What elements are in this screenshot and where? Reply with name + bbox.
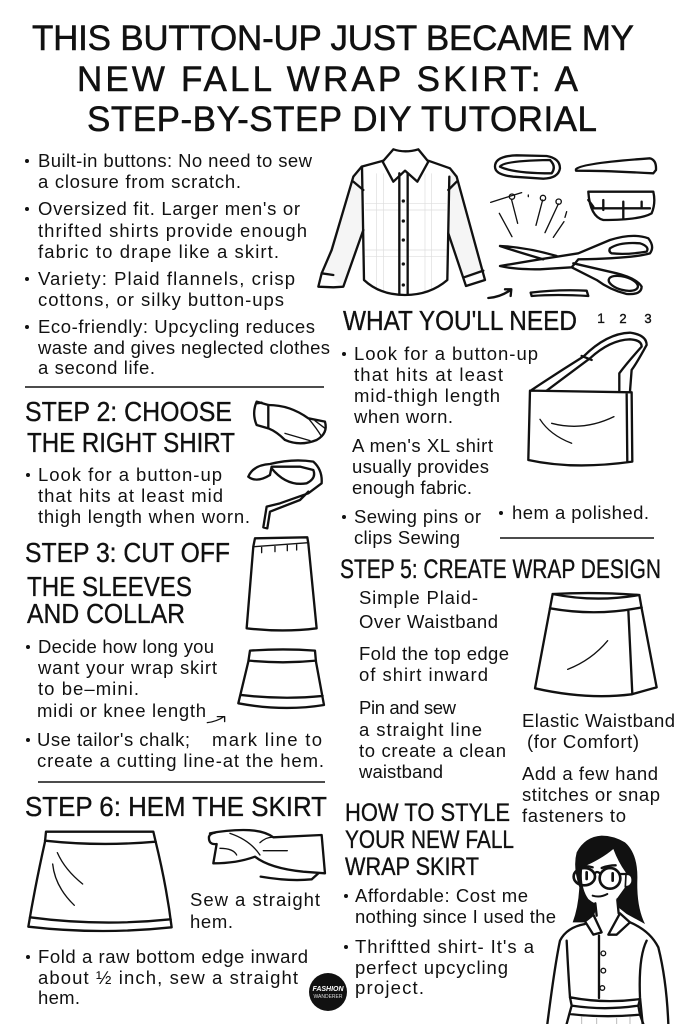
caption: sew a straight hem: hem. xyxy=(190,911,233,932)
panel: step 2 text: that hits at least mid xyxy=(38,485,223,506)
panel: what you'll need text: usually provides xyxy=(352,456,489,477)
panel: what you'll need text: clips Sewing xyxy=(354,527,460,548)
panel: step 3 text: Use tailor's chalk; xyxy=(37,729,190,750)
panel: how to style text: perfect upcycling xyxy=(355,957,508,978)
panel: step 2 text: Look for a button-up xyxy=(38,464,222,485)
panel: step 6 text: Fold a raw bottom edge inward xyxy=(38,946,308,967)
panel: what you'll need text: Look for a button-up xyxy=(354,343,538,364)
panel: why a button-up bullets: a second life. xyxy=(38,357,155,378)
panel: simple waistband text: Over Waistband xyxy=(359,611,498,632)
illustration: long skirt and short skirt xyxy=(207,537,324,723)
heading: what you'll need: 1 xyxy=(597,310,605,326)
panel: step 3 text: create a cutting line-at the hem. xyxy=(37,750,324,771)
panel: step 3 text: mark line to xyxy=(212,729,322,750)
panel: why a button-up bullets: fabric to drape like a skirt. xyxy=(38,241,279,262)
panel: why a button-up bullets: Built-in buttons: No need to sew xyxy=(38,150,313,171)
panel: how to style text: nothing since I used the xyxy=(355,906,556,927)
panel: what you'll need text: enough fabric. xyxy=(352,477,472,498)
panel: why a button-up bullets: Eco-friendly: Upcycling reduces xyxy=(38,316,315,337)
panel: why a button-up bullets: thrifted shirts provide enough xyxy=(38,220,307,241)
heading: step 6: STEP 6: HEM THE SKIRT xyxy=(25,791,327,822)
panel: step 2 text: thigh length when worn. xyxy=(38,506,250,527)
heading: step 3 xyxy=(25,537,230,629)
panel: simple waistband text: Simple Plaid- xyxy=(359,587,478,608)
illustration: plaid button-up shirt xyxy=(318,149,485,295)
heading: how to style xyxy=(345,799,514,881)
panel: how to style text xyxy=(344,885,556,998)
panel: why a button-up bullets: a closure from scratch. xyxy=(38,171,241,192)
caption: sew a straight hem xyxy=(190,889,320,932)
heading: how to style: YOUR NEW FALL xyxy=(345,826,514,854)
panel: what you'll need text: when worn. xyxy=(353,406,453,427)
panel: elastic waistband text: Add a few hand xyxy=(522,763,658,784)
illustration: wrap skirt xyxy=(535,593,657,696)
title xyxy=(32,19,634,139)
logo: fashion wanderer: WANDERER xyxy=(314,994,343,1000)
illustration: cut sleeves xyxy=(248,402,326,528)
panel: what you'll need text xyxy=(342,343,649,548)
panel: elastic waistband text: (for Comfort) xyxy=(527,731,639,752)
panel: step 3 text: to be–mini. xyxy=(38,678,139,699)
panel: step 6 text: hem. xyxy=(38,987,80,1008)
panel: why a button-up bullets: waste and gives neglected clothes xyxy=(37,337,330,358)
heading: step 3: STEP 3: CUT OFF xyxy=(25,537,230,568)
panel: how to style text: Thriftted shirt- It's a xyxy=(355,936,535,957)
panel: simple waistband text: Fold the top edge xyxy=(359,643,509,664)
heading: step 3: AND COLLAR xyxy=(27,598,185,629)
illustration: woman with glasses xyxy=(547,836,668,1024)
panel: simple waistband text: to create a clean xyxy=(359,740,506,761)
panel: step 3 text xyxy=(26,636,324,771)
panel: simple waistband text xyxy=(358,587,509,782)
panel: why a button-up bullets: cottons, or silky button-ups xyxy=(38,289,284,310)
heading: step 3: THE SLEEVES xyxy=(27,571,192,602)
panel: why a button-up bullets: Oversized fit. Larger men's or xyxy=(38,198,300,219)
panel: elastic waistband text: fasteners to xyxy=(522,805,626,826)
logo: fashion wanderer xyxy=(309,973,347,1011)
panel: step 3 text: midi or knee length xyxy=(37,700,206,721)
heading: step 2 xyxy=(25,396,235,458)
panel: why a button-up bullets: Variety: Plaid flannels, crisp xyxy=(38,268,295,289)
panel: simple waistband text: a straight line xyxy=(359,719,482,740)
title: NEW FALL WRAP SKIRT: A xyxy=(77,60,579,99)
heading: how to style: HOW TO STYLE xyxy=(345,799,510,827)
heading: how to style: WRAP SKIRT xyxy=(345,853,479,881)
panel: simple waistband text: Pin and sew xyxy=(359,697,457,718)
caption: sew a straight hem: Sew a straight xyxy=(190,889,320,910)
panel: elastic waistband text xyxy=(522,710,675,826)
panel: step 6 text xyxy=(26,946,308,1008)
illustration: twisted fabric band xyxy=(209,830,325,880)
heading: what you'll need: 3 xyxy=(644,311,652,326)
heading: step 2: THE RIGHT SHIRT xyxy=(27,427,235,458)
heading: what you'll need: WHAT YOU'LL NEED xyxy=(343,305,577,336)
panel: what you'll need text: that hits at least xyxy=(354,364,503,385)
panel: step 2 text xyxy=(26,464,250,527)
panel: step 6 text: about ½ inch, sew a straight xyxy=(38,967,298,988)
panel: simple waistband text: waistband xyxy=(358,761,443,782)
panel: step 3 text: Decide how long you xyxy=(38,636,214,657)
panel: elastic waistband text: Elastic Waistband xyxy=(522,710,675,731)
panel: how to style text: Affordable: Cost me xyxy=(355,885,528,906)
title: STEP-BY-STEP DIY TUTORIAL xyxy=(87,100,597,139)
title: THIS BUTTON-UP JUST BECAME MY xyxy=(32,19,634,58)
panel: elastic waistband text: stitches or snap xyxy=(522,784,660,805)
illustration: sewing supplies xyxy=(488,155,656,298)
panel: step 3 text: want your wrap skirt xyxy=(37,657,217,678)
illustration: cut-off sleeve bag xyxy=(528,333,647,465)
panel: why a button-up bullets xyxy=(25,150,330,378)
heading: what you'll need: 2 xyxy=(619,311,627,326)
illustration: hemmed skirt xyxy=(28,832,172,931)
panel: simple waistband text: of shirt inward xyxy=(359,664,488,685)
heading: step 2: STEP 2: CHOOSE xyxy=(25,396,232,427)
panel: what you'll need text: Sewing pins or xyxy=(354,506,481,527)
logo: fashion wanderer: FASHION xyxy=(312,986,344,993)
panel: what you'll need text: mid-thigh length xyxy=(354,385,500,406)
panel: what you'll need text: hem a polished. xyxy=(512,502,649,523)
panel: what you'll need text: A men's XL shirt xyxy=(352,435,493,456)
panel: how to style text: project. xyxy=(355,977,424,998)
